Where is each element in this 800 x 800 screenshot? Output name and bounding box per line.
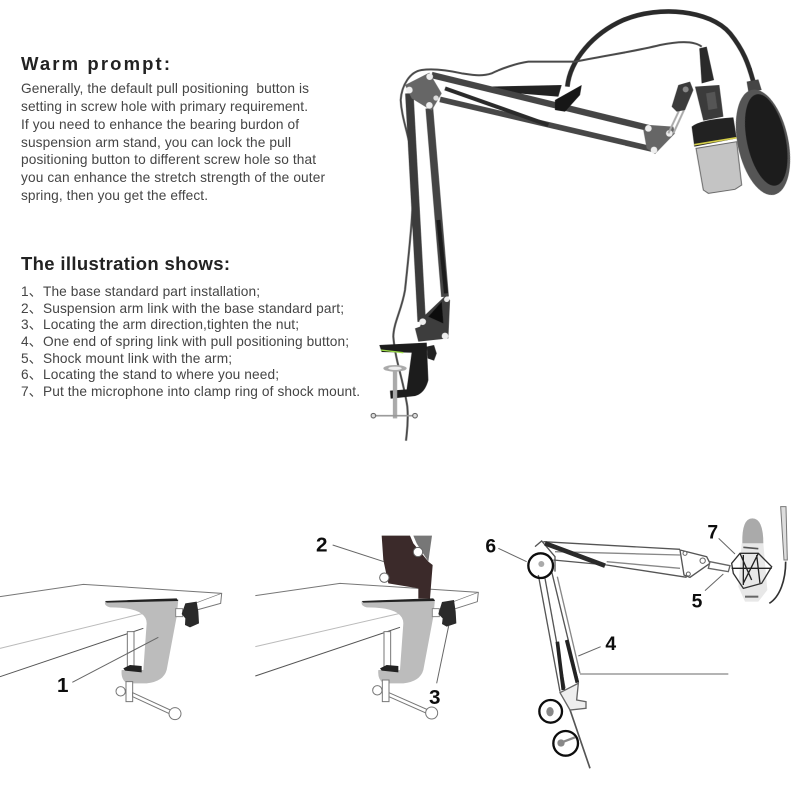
callout number 1: 1 xyxy=(57,674,68,697)
desk clamp xyxy=(371,343,437,418)
numbered list of steps: 7、 xyxy=(21,384,42,399)
arm spring xyxy=(545,543,605,566)
numbered list of steps: Shock mount link with the arm; xyxy=(43,351,232,366)
top pivot plate xyxy=(405,73,442,111)
upper arm xyxy=(432,75,653,149)
locking knob xyxy=(432,600,456,627)
lower springs xyxy=(557,640,577,690)
paragraph: warm prompt body: positioning button to different screw hole so that xyxy=(21,152,316,167)
arm base bracket xyxy=(380,536,433,599)
clamp screw and handle xyxy=(116,682,181,720)
gooseneck of pop filter xyxy=(567,11,753,87)
heading: the illustration shows: The illustration shows: xyxy=(21,253,230,274)
leader line to 3 xyxy=(437,626,449,683)
callout number 3: 3 xyxy=(429,686,440,709)
front pivot plate xyxy=(680,550,710,577)
numbered list of steps: 6、 xyxy=(21,367,42,382)
numbered list of steps: 3、 xyxy=(21,317,42,332)
numbered list of steps: Put the microphone into clamp ring of shock mount. xyxy=(43,384,360,399)
leader line to 2 xyxy=(333,545,384,562)
arm outline xyxy=(535,541,728,768)
numbered list of steps: Locating the arm direction,tighten the nut; xyxy=(43,317,299,332)
leader line to 5 xyxy=(705,574,723,591)
paragraph: warm prompt body: spring, then you get the effect. xyxy=(21,188,208,203)
paragraph: warm prompt body xyxy=(21,81,325,203)
leader line to 6 xyxy=(498,548,527,562)
numbered list of steps: 5、 xyxy=(21,351,42,366)
microphone in shock mount xyxy=(732,518,772,602)
callout number 6: 6 xyxy=(485,537,496,558)
pop filter gooseneck xyxy=(769,507,787,603)
numbered list of steps: One end of spring link with pull positioning button; xyxy=(43,334,349,349)
paragraph: warm prompt body: If you need to enhance the bearing burdon of xyxy=(21,117,299,132)
circled screw xyxy=(553,731,578,756)
clamp screw and handle xyxy=(373,680,438,719)
leader line to 1 xyxy=(72,637,158,682)
paragraph: warm prompt body: you can enhance the stretch strength of the outer xyxy=(21,170,325,185)
shock mount swivel xyxy=(668,82,693,133)
callout number 4: 4 xyxy=(605,634,616,655)
numbered list of steps: 4、 xyxy=(21,334,42,349)
callout number 5: 5 xyxy=(692,591,703,612)
circled pivot 6 xyxy=(528,553,553,578)
locking knob xyxy=(176,602,199,627)
desk outline xyxy=(255,583,478,676)
callout number 7: 7 xyxy=(707,522,718,543)
grey clamp body xyxy=(362,598,435,683)
circled knob xyxy=(539,700,562,723)
numbered list of steps: The base standard part installation; xyxy=(43,284,260,299)
photo: microphone on suspension arm stand xyxy=(371,11,799,441)
desk outline xyxy=(0,584,222,677)
paragraph: warm prompt body: suspension arm stand, you can lock the pull xyxy=(21,135,291,150)
diagram 2: arm base on clamp xyxy=(255,534,478,719)
paragraph: warm prompt body: setting in screw hole with primary requirement. xyxy=(21,99,308,114)
lower pivot plate and base link xyxy=(415,296,450,342)
lower bracket xyxy=(560,683,586,710)
microphone cable xyxy=(393,42,702,441)
shock mount connector xyxy=(708,562,730,572)
callout number 2: 2 xyxy=(316,534,327,557)
text block: warm prompt xyxy=(21,53,325,203)
numbered list of steps: 2、 xyxy=(21,301,42,316)
numbered list of steps: Suspension arm link with the base standard part; xyxy=(43,301,344,316)
heading: warm prompt: Warm prompt: xyxy=(21,53,170,74)
front pivot plate xyxy=(643,125,675,154)
microphone xyxy=(692,47,742,193)
text block: illustration list xyxy=(21,253,360,399)
diagram 1: clamp on desk xyxy=(0,584,222,720)
leader line to 4 xyxy=(578,647,601,656)
grey clamp body xyxy=(105,598,178,683)
leader line to 7 xyxy=(719,538,735,554)
numbered list of steps: Locating the stand to where you need; xyxy=(43,367,279,382)
diagram 3: arm with shock mount and microphone xyxy=(485,507,787,768)
paragraph: warm prompt body: Generally, the default pull positioning button is xyxy=(21,81,309,96)
numbered list of steps: 1、 xyxy=(21,284,42,299)
lower arm xyxy=(409,93,446,322)
numbered list of steps xyxy=(21,284,360,399)
pop filter xyxy=(727,79,799,200)
